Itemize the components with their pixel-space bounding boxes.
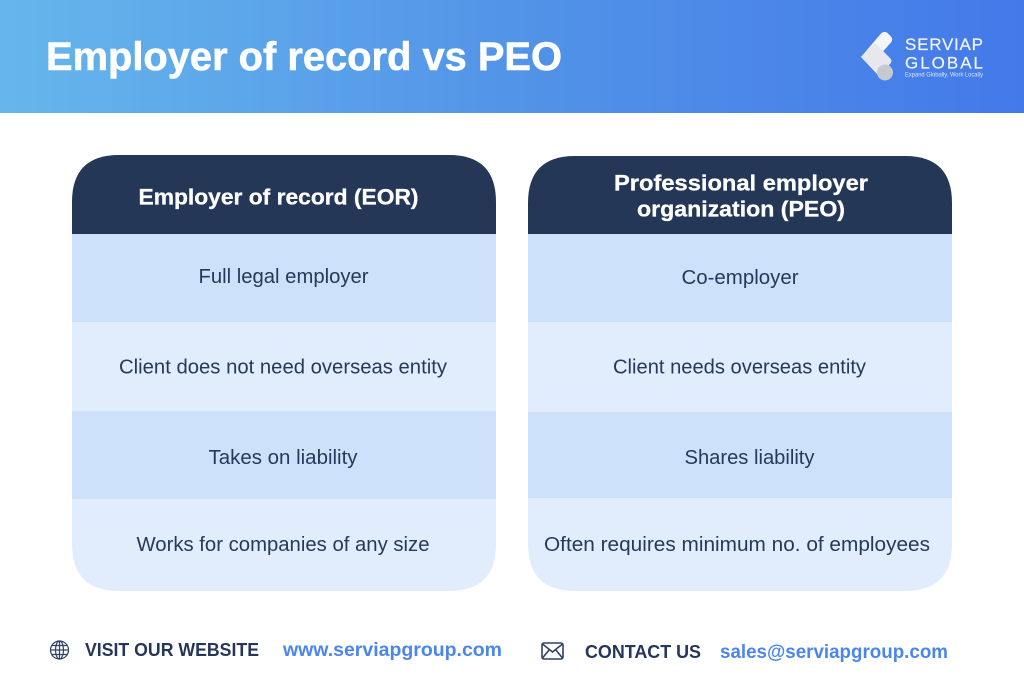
panel: professional employer organization [528,156,952,591]
header: PEO [528,156,952,234]
row 4 [72,499,496,591]
row 3 text: Shares liability [684,447,814,469]
icon: globe [50,641,68,659]
heading: PEO: Professional employer [614,170,868,196]
row 1 [72,234,496,322]
logo [861,32,983,80]
row 3 [528,412,952,499]
heading: PEO: organization (PEO) [637,196,845,222]
header: EOR [72,155,496,234]
icon: envelope [542,643,563,659]
row 2 text: Client does not need overseas entity [119,356,447,378]
row 1 [528,234,952,322]
row 2 [528,322,952,412]
footer: website [50,639,502,661]
website url: www.serviapgroup.com [282,640,502,661]
contact label: CONTACT US [585,641,701,662]
logo wordmark: SERVIAP [905,35,983,54]
contact email: sales@serviapgroup.com [720,642,948,663]
heading: EOR: Employer of record (EOR) [138,184,418,210]
row 4 text: Often requires minimum no. of employees [544,534,930,556]
logo: GLOBAL [905,54,983,72]
heading: PEO [614,170,868,222]
row 3 [72,411,496,499]
row 4 text: Works for companies of any size [136,534,430,556]
row 4 [528,498,952,591]
logo tagline: Expand Globally, Work Locally [905,72,983,78]
row 2 [72,322,496,411]
row 2 text: Client needs overseas entity [613,356,866,378]
header banner [0,0,1024,113]
row 3 text: Takes on liability [208,447,358,469]
footer: contact [542,641,948,663]
row 1 text: Full legal employer [198,266,369,288]
row 1 text: Co-employer [682,267,799,289]
icon: logo mark [861,32,893,80]
website label: VISIT OUR WEBSITE [85,639,259,660]
title: Employer of record vs PEO [46,35,562,79]
panel: employer of record [72,155,496,591]
